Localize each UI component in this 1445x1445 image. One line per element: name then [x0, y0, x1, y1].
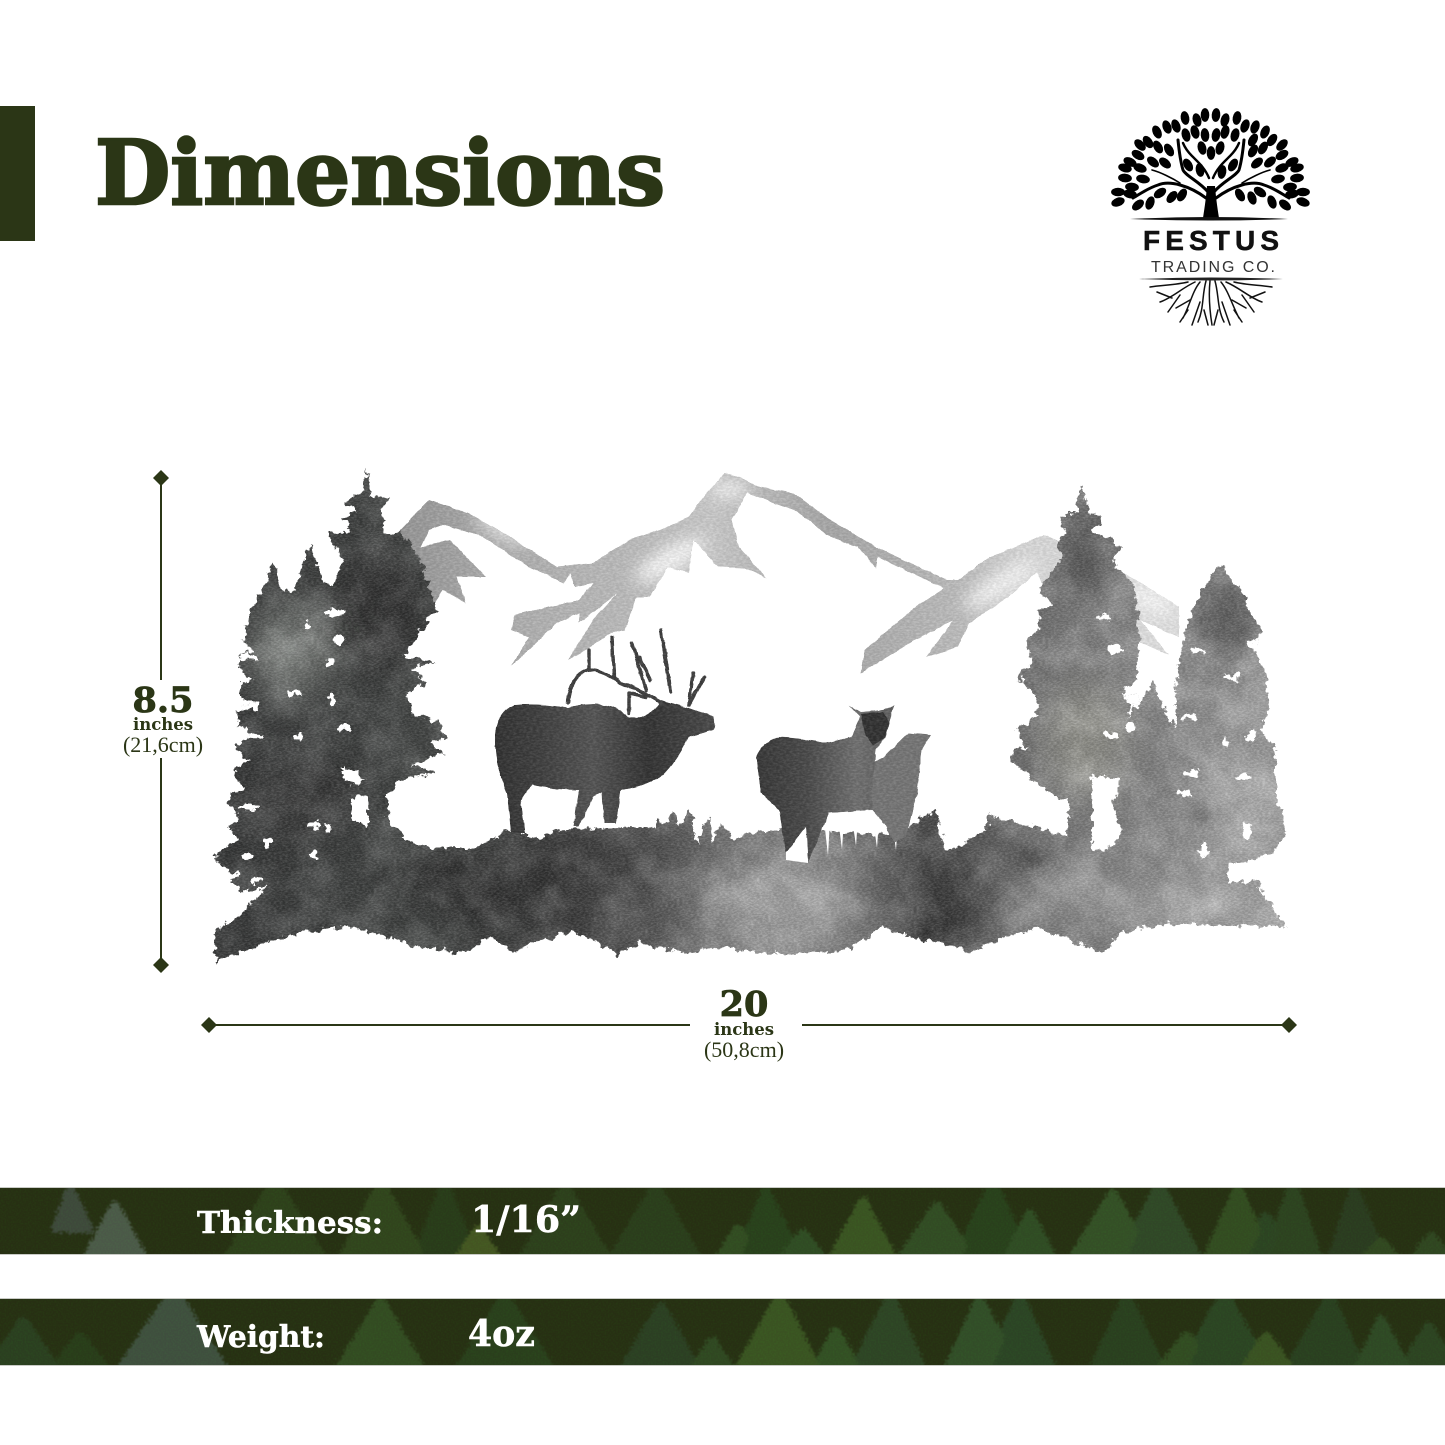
- fine dark patches: [305, 768, 1210, 939]
- accent bar: [0, 106, 35, 241]
- ground line: [1130, 217, 1288, 220]
- icon: tree leaves: [1110, 108, 1311, 213]
- elk antlers: [568, 630, 704, 713]
- value: thickness: 1/16”: [471, 1199, 581, 1241]
- height label: [120, 680, 206, 758]
- icon: roots: [1150, 281, 1272, 325]
- width label: (50,8cm): [704, 1037, 784, 1062]
- width label: 20: [720, 984, 768, 1025]
- logo wordmark: FESTUS: [1143, 225, 1279, 256]
- forest texture: [0, 1188, 1445, 1254]
- doe face: [861, 712, 889, 746]
- gap and grass under doe: [786, 813, 898, 863]
- height dimension line: [153, 470, 169, 973]
- elk body: [495, 700, 715, 833]
- calf: [870, 733, 931, 843]
- icon: tree trunk and branches: [1133, 140, 1289, 218]
- label: weight: Weight:: [196, 1320, 325, 1355]
- width label: [704, 984, 784, 1062]
- metal wall art: elk and mountain scene: [214, 468, 1290, 962]
- logo tagline: TRADING CO.: [1151, 259, 1275, 276]
- width label: inches: [714, 1020, 774, 1039]
- doe: [756, 705, 895, 863]
- height label: inches: [133, 715, 193, 734]
- height label: 8.5: [133, 680, 193, 721]
- label: thickness: Thickness:: [197, 1206, 383, 1241]
- root line: [1139, 278, 1283, 280]
- title: Dimensions: [95, 120, 665, 225]
- height label: (21,6cm): [123, 732, 203, 757]
- band: thickness: [0, 1170, 1445, 1270]
- logo: Festus Trading Co.: [1110, 108, 1311, 325]
- cut-outs in trees: [239, 609, 1260, 883]
- forest texture: [0, 1299, 1445, 1365]
- elk and deer: [495, 630, 931, 863]
- forest and ground silhouette: [214, 468, 1290, 962]
- value: weight: 4oz: [468, 1313, 535, 1355]
- mountains: [400, 473, 1179, 673]
- width dimension line: [201, 1017, 1297, 1033]
- band: weight: [0, 1298, 1445, 1366]
